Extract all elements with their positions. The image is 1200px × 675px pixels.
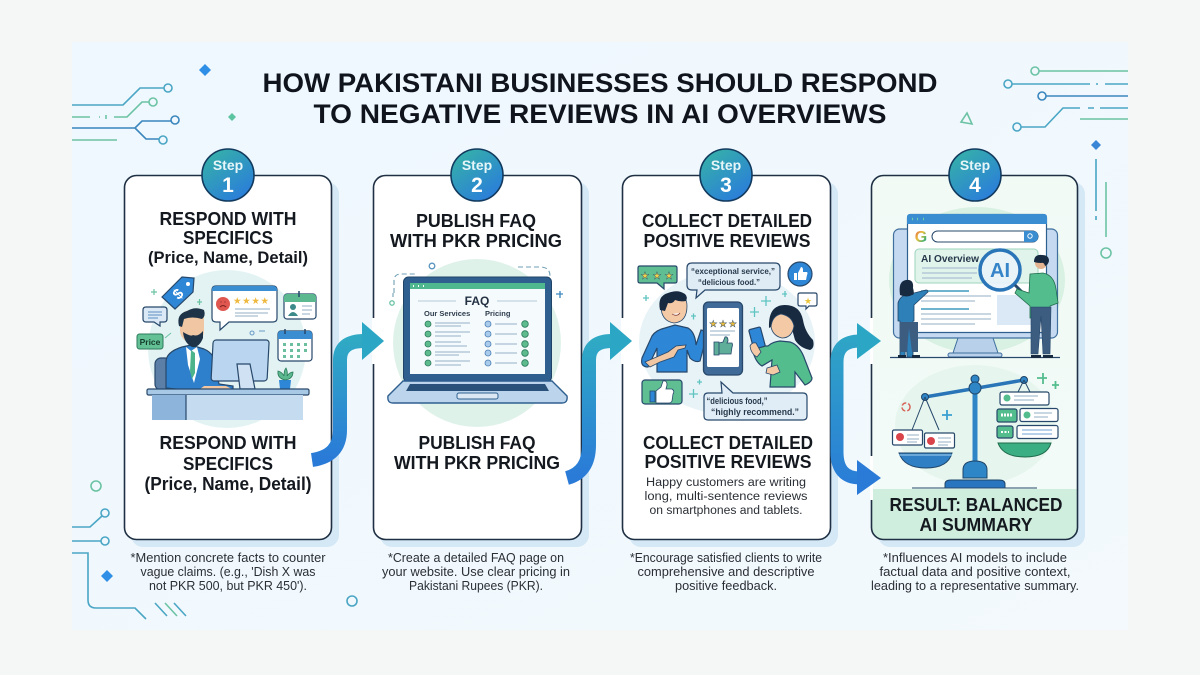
panel: step 1 respond with specifics bbox=[124, 149, 339, 547]
step 4 note: factual data and positive context, bbox=[880, 565, 1070, 579]
illustration: laptop with FAQ page: Our Services bbox=[424, 309, 470, 318]
step 3 lower heading and description bbox=[643, 432, 813, 517]
step 3 note: *Encourage satisfied clients to write bbox=[630, 551, 822, 565]
result heading: RESULT: BALANCED bbox=[890, 494, 1062, 515]
step 2 lower heading: WITH PKR PRICING bbox=[394, 452, 560, 473]
illustration: laptop with FAQ page: FAQ bbox=[465, 294, 489, 308]
illustration: AI overview on monitor with two people bbox=[889, 207, 1065, 358]
step 3 note: comprehensive and descriptive bbox=[638, 565, 815, 579]
circuit decoration: bottom left bbox=[72, 481, 357, 619]
step 2 note: *Create a detailed FAQ page on bbox=[388, 551, 564, 565]
title: TO NEGATIVE REVIEWS IN AI OVERVIEWS bbox=[314, 99, 886, 129]
step 1 heading bbox=[148, 208, 308, 267]
illustration: laptop with FAQ page: Pricing bbox=[485, 309, 511, 318]
step 3 lower heading and description: long, multi-sentence reviews bbox=[644, 491, 808, 503]
step 3 badge: 3 bbox=[720, 174, 732, 197]
illustration: happy customers writing reviews: ★★★ bbox=[709, 319, 737, 330]
illustration: happy customers writing reviews bbox=[638, 262, 817, 420]
arrow: step 1 to step 2 bbox=[312, 318, 384, 460]
step 4 badge: Step bbox=[960, 157, 990, 173]
step 1 heading: SPECIFICS bbox=[183, 227, 273, 248]
circuit decoration: top right bbox=[961, 67, 1128, 258]
result heading: AI SUMMARY bbox=[920, 514, 1033, 535]
title bbox=[262, 68, 938, 129]
step 2 lower heading bbox=[394, 432, 560, 473]
step 2 note: your website. Use clear pricing in bbox=[382, 565, 570, 579]
step 3 lower heading and description: POSITIVE REVIEWS bbox=[644, 451, 812, 472]
illustration: happy customers writing reviews: “delicious food.” bbox=[698, 277, 760, 287]
step 1 lower heading bbox=[144, 432, 312, 494]
step 3 lower heading and description: COLLECT DETAILED bbox=[643, 432, 813, 453]
step 2 badge: Step bbox=[462, 157, 492, 173]
step 3 badge: Step bbox=[711, 157, 741, 173]
panel: step 3 collect positive reviews bbox=[622, 149, 838, 547]
step 1 badge: Step bbox=[213, 157, 243, 173]
step 3 heading: COLLECT DETAILED bbox=[642, 210, 812, 231]
illustration: support agent at desk with review bubbles: $ bbox=[169, 285, 188, 303]
result heading bbox=[890, 494, 1062, 535]
illustration: happy customers writing reviews: “delicious food,” bbox=[706, 396, 768, 406]
step 2 lower heading: PUBLISH FAQ bbox=[418, 432, 536, 453]
illustration: happy customers writing reviews: ★ bbox=[804, 296, 812, 306]
step 2 heading: PUBLISH FAQ bbox=[416, 210, 536, 231]
panel: step 2 publish FAQ bbox=[374, 149, 589, 547]
step 1 note: not PKR 500, but PKR 450'). bbox=[149, 579, 307, 593]
step 1 heading: RESPOND WITH bbox=[160, 208, 296, 229]
step 2 badge bbox=[451, 149, 503, 201]
panel: step 4 balanced AI summary bbox=[872, 149, 1085, 547]
step 2 note: Pakistani Rupees (PKR). bbox=[409, 579, 543, 593]
arrow: step 2 to step 3 bbox=[567, 318, 632, 478]
step 2 note bbox=[382, 551, 570, 593]
illustration: happy customers writing reviews: “exceptional service,” bbox=[691, 266, 775, 276]
step 1 lower heading: SPECIFICS bbox=[183, 453, 273, 474]
step 3 badge bbox=[700, 149, 752, 201]
illustration: support agent at desk with review bubbles: ★★★★ bbox=[233, 296, 269, 307]
step 3 lower heading and description: on smartphones and tablets. bbox=[650, 505, 802, 517]
step 4 note: leading to a representative summary. bbox=[871, 579, 1079, 593]
step 1 note: vague claims. (e.g., 'Dish X was bbox=[140, 565, 316, 579]
step 1 badge: 1 bbox=[222, 174, 234, 197]
arrow: step 3 to step 4 bbox=[837, 318, 881, 500]
illustration: AI overview on monitor with two people: G bbox=[915, 229, 927, 246]
step 2 heading: WITH PKR PRICING bbox=[390, 230, 562, 251]
step 1 note bbox=[130, 551, 326, 593]
step 4 note bbox=[871, 551, 1079, 593]
step 3 heading bbox=[642, 210, 812, 251]
illustration: balance scale with reviews bbox=[892, 365, 1059, 488]
illustration: support agent at desk with review bubbles: Price bbox=[140, 337, 161, 347]
step 1 lower heading: RESPOND WITH bbox=[160, 432, 296, 453]
step 4 note: *Influences AI models to include bbox=[883, 551, 1067, 565]
step 1 badge bbox=[202, 149, 254, 201]
step 3 lower heading and description: Happy customers are writing bbox=[646, 477, 806, 489]
step 3 note: positive feedback. bbox=[675, 579, 777, 593]
step 4 badge: 4 bbox=[969, 174, 981, 197]
step 3 heading: POSITIVE REVIEWS bbox=[644, 230, 810, 251]
step 1 heading: (Price, Name, Detail) bbox=[148, 248, 308, 267]
step 3 note bbox=[630, 551, 822, 593]
step 1 lower heading: (Price, Name, Detail) bbox=[144, 473, 312, 494]
illustration: AI overview on monitor with two people: AI Overview bbox=[921, 254, 979, 265]
title: HOW PAKISTANI BUSINESSES SHOULD RESPOND bbox=[262, 68, 938, 98]
illustration: support agent at desk with review bubbles bbox=[137, 270, 316, 428]
illustration: happy customers writing reviews: “highly recommend.” bbox=[711, 407, 799, 417]
illustration: AI overview on monitor with two people: AI bbox=[990, 260, 1010, 282]
circuit decoration: top left bbox=[72, 64, 236, 144]
illustration: laptop with FAQ page bbox=[388, 259, 567, 427]
step 4 badge bbox=[949, 149, 1001, 201]
step 1 note: *Mention concrete facts to counter bbox=[130, 551, 326, 565]
step 2 badge: 2 bbox=[471, 174, 483, 197]
step 2 heading bbox=[390, 210, 562, 251]
illustration: happy customers writing reviews: ★★★ bbox=[640, 271, 674, 282]
